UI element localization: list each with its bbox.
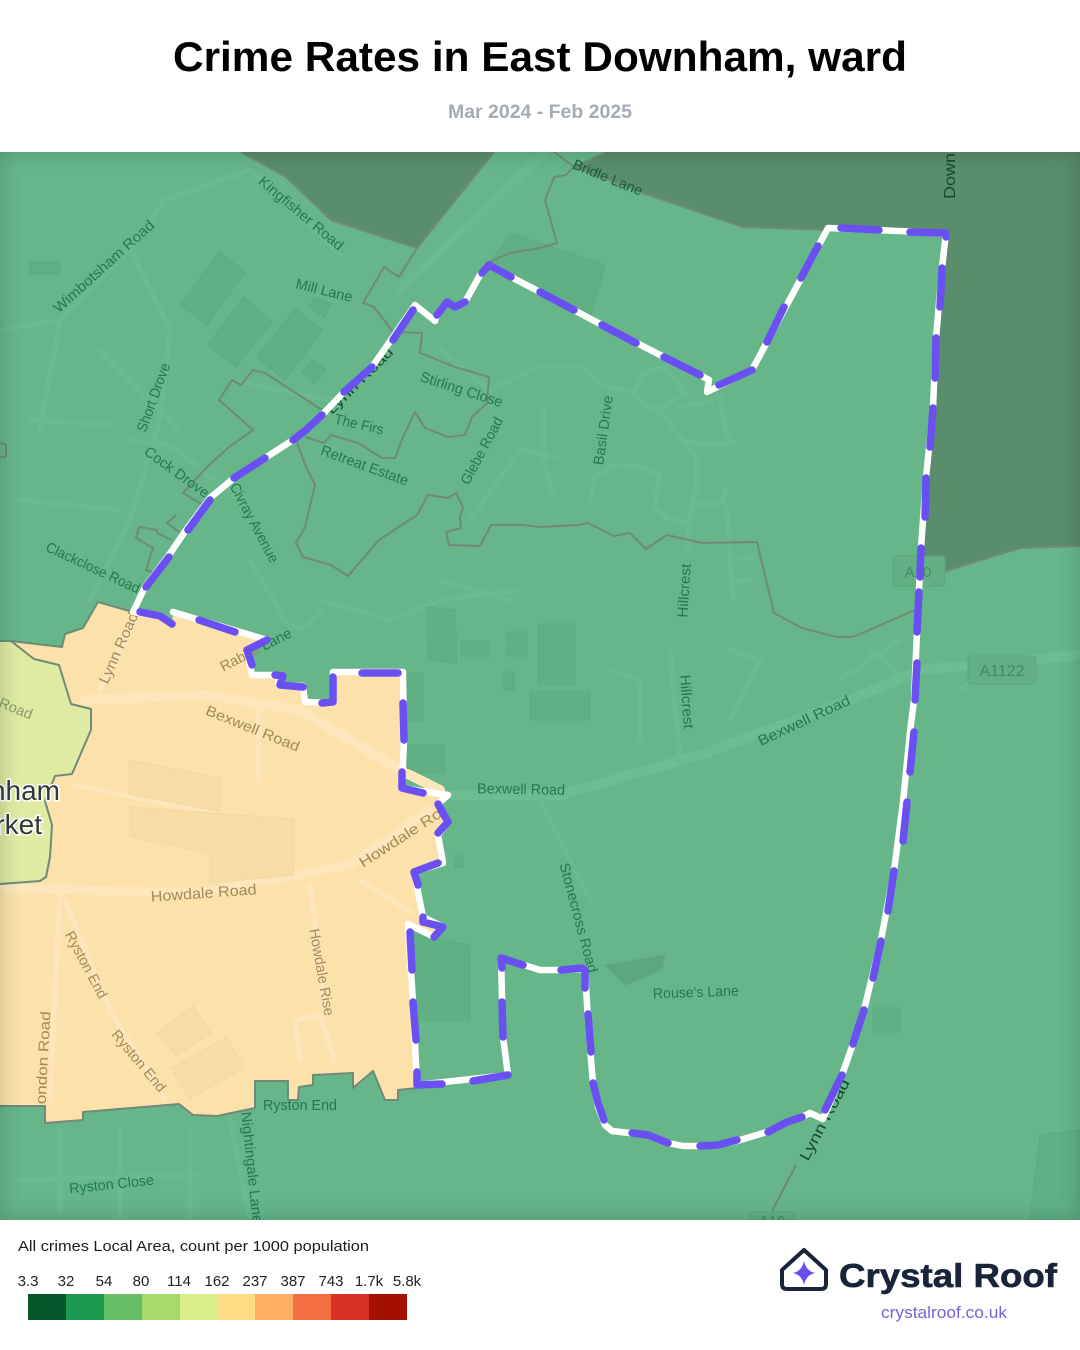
legend tick labels: 743: [318, 1273, 344, 1290]
label: Short Drove: Short Drove: [134, 361, 174, 434]
legend colour bar: [28, 1294, 407, 1320]
area boundary lines: [0, 152, 1080, 1215]
legend tick labels: 80: [133, 1273, 149, 1290]
label: Civray Avenue: Civray Avenue: [226, 481, 281, 566]
legend tick labels: 3.3: [18, 1273, 38, 1290]
label: Bexwell Road middle: Bexwell Road: [477, 781, 565, 799]
label: A1122 shield: A1122: [979, 663, 1025, 680]
ward boundary: white line with purple dashes: [133, 228, 946, 1146]
buildings: green area: [30, 233, 1080, 1220]
buildings: peach area: [129, 760, 294, 1099]
label: Kingfisher Road: Kingfisher Road: [255, 174, 346, 254]
label: Bexwell Road right: Bexwell Road: [756, 693, 853, 750]
label: Clackclose Road: Clackclose Road: [43, 540, 142, 597]
logo wordmark: Crystal Roof: [839, 1257, 1058, 1294]
map labels: [0, 153, 1036, 1232]
title: Crime Rates in East Downham, ward: [173, 33, 907, 80]
label: Basil Drive: Basil Drive: [591, 395, 617, 466]
label: Cock Drove: Cock Drove: [141, 444, 212, 502]
legend tick labels: 387: [280, 1273, 306, 1290]
label: Retreat Estate: Retreat Estate: [318, 443, 410, 489]
label: Nightingale Lane: Nightingale Lane: [237, 1111, 265, 1224]
label: Bridle Lane: Bridle Lane: [570, 157, 645, 200]
label: Howdale Rise: Howdale Rise: [305, 928, 336, 1017]
label: Howdale Road: Howdale Road: [150, 881, 257, 906]
legend title: All crimes Local Area, count per 1000 population: [18, 1238, 369, 1255]
label: Hillcrest lower: Hillcrest: [676, 674, 696, 729]
legend tick labels: [18, 1273, 422, 1290]
label: Mill Lane: Mill Lane: [294, 276, 354, 306]
legend tick labels: 114: [167, 1273, 191, 1290]
legend tick labels: 54: [96, 1273, 112, 1290]
label: Stonecross Road: Stonecross Road: [556, 861, 600, 975]
label: Ryston End upper: Ryston End: [61, 929, 110, 1002]
website url: crystalroof.co.uk: [881, 1304, 1008, 1322]
legend tick labels: 162: [204, 1273, 230, 1290]
legend: [18, 1238, 422, 1320]
label: A10 shield: A10: [905, 564, 931, 581]
logo: Crystal Roof: [782, 1250, 1058, 1322]
label: Down: Down: [942, 153, 959, 199]
map edge vignette: [0, 152, 1080, 1220]
label: Hillcrest upper: Hillcrest: [675, 563, 695, 618]
label: A1122 shield: [968, 656, 1036, 684]
label: Ryston End lower: Ryston End: [108, 1027, 169, 1096]
area: peach higher-crime neighbourhood: [0, 602, 448, 1123]
label: Bexwell Road peach: Bexwell Road: [203, 703, 302, 755]
area: light green neighbourhood: [0, 641, 91, 884]
panel: choropleth map: [0, 152, 1080, 1232]
legend tick labels: 32: [58, 1273, 74, 1290]
legend tick labels: 1.7k: [355, 1273, 384, 1290]
label: Ryston End green: Ryston End: [263, 1098, 337, 1114]
label: Glebe Road: Glebe Road: [458, 415, 507, 488]
label: A10 shield: [893, 556, 945, 586]
label: Ryston Close: Ryston Close: [68, 1173, 155, 1197]
label: Rouse's Lane: Rouse's Lane: [653, 984, 739, 1002]
legend tick labels: 237: [242, 1273, 268, 1290]
area: darker low-crime zones: [241, 152, 1080, 580]
legend tick labels: 5.8k: [393, 1273, 422, 1290]
label: Lynn Road green lower: Lynn Road: [796, 1076, 854, 1164]
label: Stirling Close: Stirling Close: [418, 369, 505, 411]
label: Lynn Road peach: Lynn Road: [97, 610, 142, 686]
label: A10 lower shield: [748, 1212, 796, 1220]
label: Rabbit Lane: Rabbit Lane: [218, 626, 295, 675]
label: London Road: ondon Road: [34, 1011, 54, 1105]
subtitle: date range: Mar 2024 - Feb 2025: [448, 102, 632, 123]
icon: house with star: [782, 1250, 826, 1289]
roads: green area streets: [0, 152, 1080, 1220]
label: Wimbotsham Road: Wimbotsham Road: [51, 218, 158, 316]
roads: peach area streets: [0, 620, 440, 1100]
label: Lynn Road green upper: Lynn Road: [323, 344, 396, 417]
label: Howdale Road slanted: Howdale Ro: [357, 806, 445, 871]
label: A10 lower shield: A10: [759, 1213, 785, 1230]
label: The Firs: The Firs: [333, 412, 385, 439]
